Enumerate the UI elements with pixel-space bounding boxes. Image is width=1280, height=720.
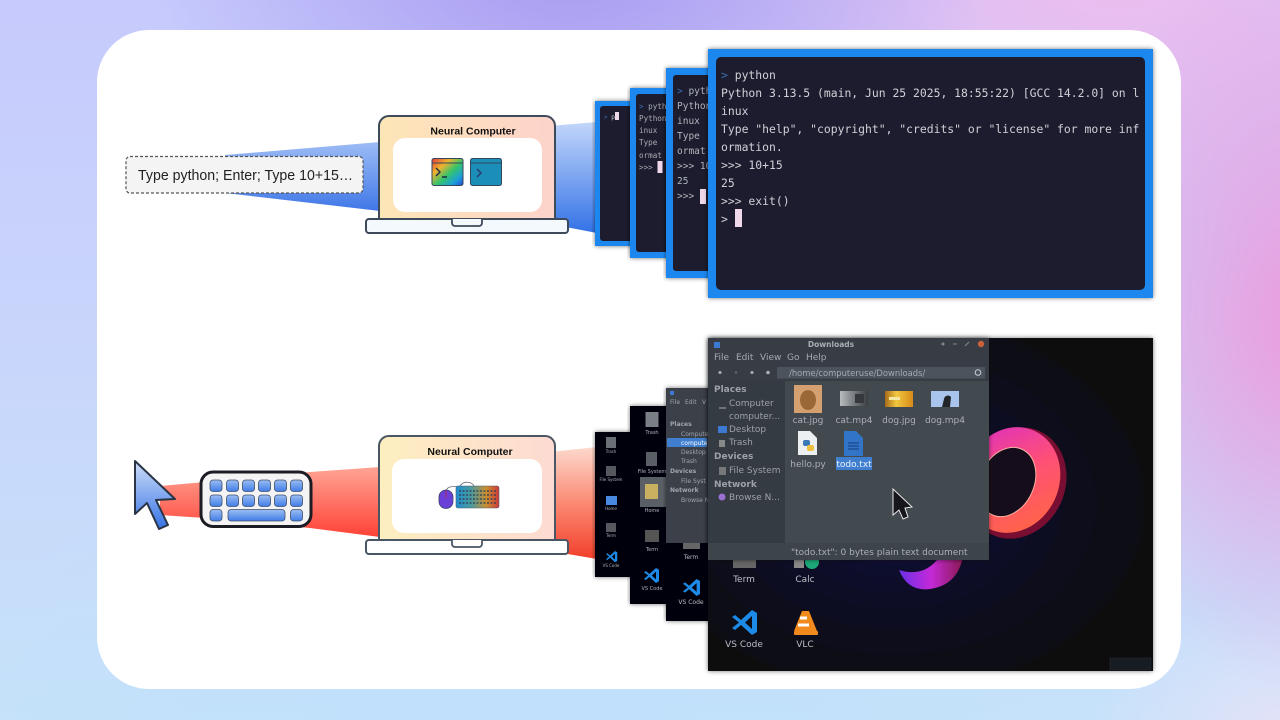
desktop frame 2: Home — [645, 508, 659, 514]
desktop frame 2 — [630, 406, 680, 604]
desktop icons: Term — [732, 575, 755, 585]
terminal frame 4: main: >>> exit() — [721, 194, 790, 208]
icon: arrow cursor — [135, 461, 175, 529]
terminal frame 3: > pyth — [677, 86, 711, 97]
desktop frame 3 with file manager: Desktop — [681, 449, 706, 456]
file manager sidebar: Network — [714, 480, 758, 490]
terminal frame 3 — [666, 68, 716, 278]
file manager window: Downloads — [808, 340, 855, 349]
file manager sidebar: Trash — [728, 438, 753, 448]
file manager window: /home/computeruse/Downloads/ — [789, 368, 925, 378]
file manager window: View — [760, 353, 781, 363]
terminal frame 3: >>> 10 — [677, 161, 712, 172]
beam: red input flow — [160, 447, 597, 559]
laptop: top Neural Computer: Neural Computer — [430, 126, 516, 138]
icon: blue terminal — [470, 158, 502, 186]
terminal frame 3: Type — [677, 131, 700, 142]
desktop frame 2: File System — [638, 469, 666, 475]
desktop frame 2: Term — [645, 547, 658, 553]
terminal frame 2 — [630, 88, 680, 258]
file manager window: Edit — [736, 353, 754, 363]
desktop frame 3 with file manager: Browse N — [681, 497, 709, 504]
desktop frame 1: File System — [600, 477, 623, 482]
laptop: bottom Neural Computer: Neural Computer — [427, 446, 513, 458]
terminal frame 2: > pyth — [639, 102, 666, 111]
desktop frame 3 with file manager: File Syst — [681, 478, 706, 485]
terminal frame 4: main — [708, 49, 1153, 298]
prompt text box: Type python; Enter; Type 10+15… — [138, 167, 353, 184]
desktop frame 3 with file manager: V — [702, 399, 707, 406]
desktop frame 3 with file manager: Network — [670, 487, 700, 494]
icon: mouse and keyboard — [439, 482, 499, 508]
desktop frame 3 with file manager: Compute — [681, 431, 709, 438]
file manager window — [708, 338, 989, 560]
desktop frame 3 with file manager: Places — [670, 421, 692, 428]
laptop: top Neural Computer — [366, 116, 568, 233]
prompt text box — [126, 156, 363, 193]
desktop icons: VLC — [796, 640, 814, 650]
file grid: cat.mp4 — [835, 416, 873, 426]
file grid: dog.mp4 — [925, 416, 965, 426]
terminal frame 3: 25 — [677, 176, 688, 187]
terminal frame 4: main: >>> 10+15 — [721, 158, 783, 172]
wallpaper ring — [899, 411, 1084, 589]
laptop: bottom Neural Computer — [366, 436, 568, 554]
desktop frame 3 with file manager: File — [670, 399, 680, 406]
desktop frame 1: VS Code — [603, 563, 620, 568]
desktop stack — [595, 338, 1153, 671]
file manager sidebar: computer... — [729, 412, 780, 422]
desktop frame 4: main — [708, 338, 1153, 671]
desktop frame 1: Trash — [605, 449, 617, 454]
file grid: cat.jpg — [793, 416, 823, 426]
file manager window: Help — [806, 353, 827, 363]
desktop icons: VS Code — [725, 640, 763, 650]
terminal frame 2: >>> — [639, 163, 653, 172]
terminal frame 4: main: 25 — [721, 176, 735, 190]
terminal frame 2: inux — [639, 126, 658, 135]
file manager sidebar — [714, 385, 780, 503]
desktop frame 3 with file manager: Trash — [680, 458, 697, 465]
file grid: todo.txt — [836, 460, 872, 470]
terminal frame 3: >>> — [677, 191, 694, 202]
terminal frame 4: main: inux — [721, 104, 749, 118]
terminal stack — [595, 49, 1153, 298]
terminal frame 1 — [595, 101, 645, 246]
terminal frame 4: main: Python 3.13.5 (main, Jun 25 2025, 18:55:22) [GCC 14.2.0] on l — [721, 86, 1139, 100]
taskbar widget — [1110, 658, 1151, 670]
terminal frame 1: > p — [604, 114, 615, 121]
desktop frame 2: Trash — [644, 430, 659, 436]
terminal frame 4: main: > python — [721, 68, 776, 82]
file grid — [790, 385, 965, 470]
desktop frame 3 with file manager: compute — [681, 440, 708, 447]
desktop frame 3 with file manager: Devices — [670, 468, 697, 475]
terminal frame 3: inux — [677, 116, 700, 127]
terminal frame 2: Type — [639, 138, 658, 147]
desktop icons — [725, 555, 819, 650]
file manager window: File — [714, 353, 730, 363]
terminal frame 2: Python — [639, 114, 666, 123]
desktop frame 2: VS Code — [642, 586, 662, 592]
desktop frame 1 — [595, 432, 645, 577]
file manager sidebar: Devices — [714, 452, 753, 462]
file manager window: "todo.txt": 0 bytes plain text document — [791, 548, 968, 558]
terminal frame 4: main: > — [721, 212, 728, 226]
file manager sidebar: Places — [714, 385, 747, 395]
icon: keyboard — [201, 472, 311, 526]
terminal frame 3: Python — [677, 101, 711, 112]
file grid: hello.py — [790, 460, 826, 470]
file manager sidebar: Browse N... — [729, 493, 780, 503]
file manager window: Go — [787, 353, 800, 363]
desktop frame 3 with file manager: Edit — [685, 399, 697, 406]
file manager sidebar: File System — [729, 466, 780, 476]
file manager sidebar: Desktop — [729, 425, 766, 435]
beam: blue prompt flow — [225, 122, 597, 233]
terminal frame 3: ormat — [677, 146, 706, 157]
icon: black cursor — [893, 489, 912, 519]
desktop frame 1: Home — [605, 506, 617, 511]
terminal frame 2: ormat — [639, 151, 662, 160]
desktop frame 3 with file manager — [666, 388, 716, 621]
icon: rainbow terminal — [432, 158, 463, 186]
desktop icons: Calc — [795, 575, 815, 585]
desktop frame 3 with file manager: Term — [683, 554, 698, 561]
file manager sidebar: Computer — [729, 399, 774, 409]
terminal frame 4: main: ormation. — [721, 140, 783, 154]
white card — [97, 30, 1181, 689]
desktop frame 3 with file manager: VS Code — [678, 599, 704, 606]
file grid: dog.jpg — [882, 416, 916, 426]
terminal frame 4: main: Type "help", "copyright", "credits" or "license" for more inf — [721, 122, 1139, 136]
desktop frame 1: Term — [605, 533, 616, 538]
